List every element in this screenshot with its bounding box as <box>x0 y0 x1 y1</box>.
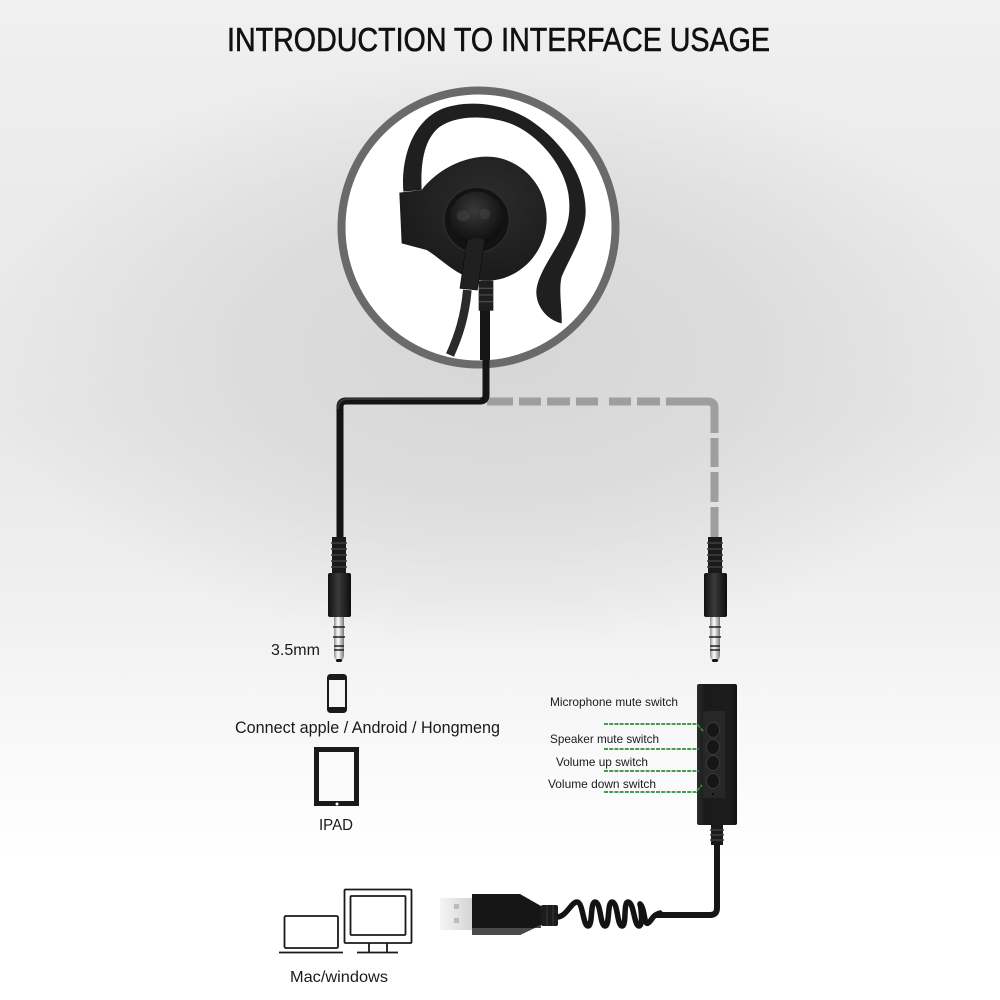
straight cable strain relief <box>479 281 493 360</box>
icon: desktop monitor <box>344 890 412 952</box>
phone connection label: Connect apple / Android / Hongmeng <box>235 719 500 737</box>
left 3.5mm jack <box>328 537 351 662</box>
gooseneck microphone wire <box>450 290 467 355</box>
icon: tablet <box>316 750 356 806</box>
inline controller <box>697 684 737 825</box>
green switch leader lines <box>604 724 703 792</box>
switch labels: Volume up switch <box>556 755 648 769</box>
switch labels <box>548 695 678 791</box>
indicator dot <box>712 793 714 795</box>
iPad label: IPAD <box>319 817 353 834</box>
switch labels: Volume down switch <box>548 777 656 791</box>
switch labels: Speaker mute switch <box>550 732 659 746</box>
plug body <box>472 894 541 935</box>
switch labels: Microphone mute switch <box>550 695 678 709</box>
jack housing <box>328 573 351 617</box>
speaker bud <box>444 187 509 253</box>
main cable to left jack <box>338 358 486 538</box>
3.5mm label: 3.5mm <box>271 642 320 659</box>
icon: laptop <box>279 916 343 952</box>
button panel <box>703 711 725 798</box>
strain relief <box>541 905 558 926</box>
controller strain relief <box>710 825 724 845</box>
metal connector <box>440 898 473 930</box>
metal plug <box>709 617 721 662</box>
buttons <box>706 722 720 788</box>
jack housing <box>704 573 727 617</box>
microphone stem <box>460 237 485 290</box>
strain relief <box>331 537 347 573</box>
ear hook <box>403 104 586 323</box>
strain relief <box>707 537 723 573</box>
earphone illustration <box>399 104 586 360</box>
computer label: Mac/windows <box>290 969 388 986</box>
icon: phone <box>328 675 346 712</box>
dashed cable path <box>487 402 714 538</box>
earphone circle badge <box>342 90 616 364</box>
metal plug <box>333 617 345 662</box>
USB plug <box>440 894 558 935</box>
right 3.5mm jack <box>704 537 727 662</box>
ear piece body <box>399 157 547 281</box>
title: INTRODUCTION TO INTERFACE USAGE <box>227 21 770 58</box>
coiled cable <box>556 902 660 926</box>
USB cable with coil <box>655 843 717 915</box>
